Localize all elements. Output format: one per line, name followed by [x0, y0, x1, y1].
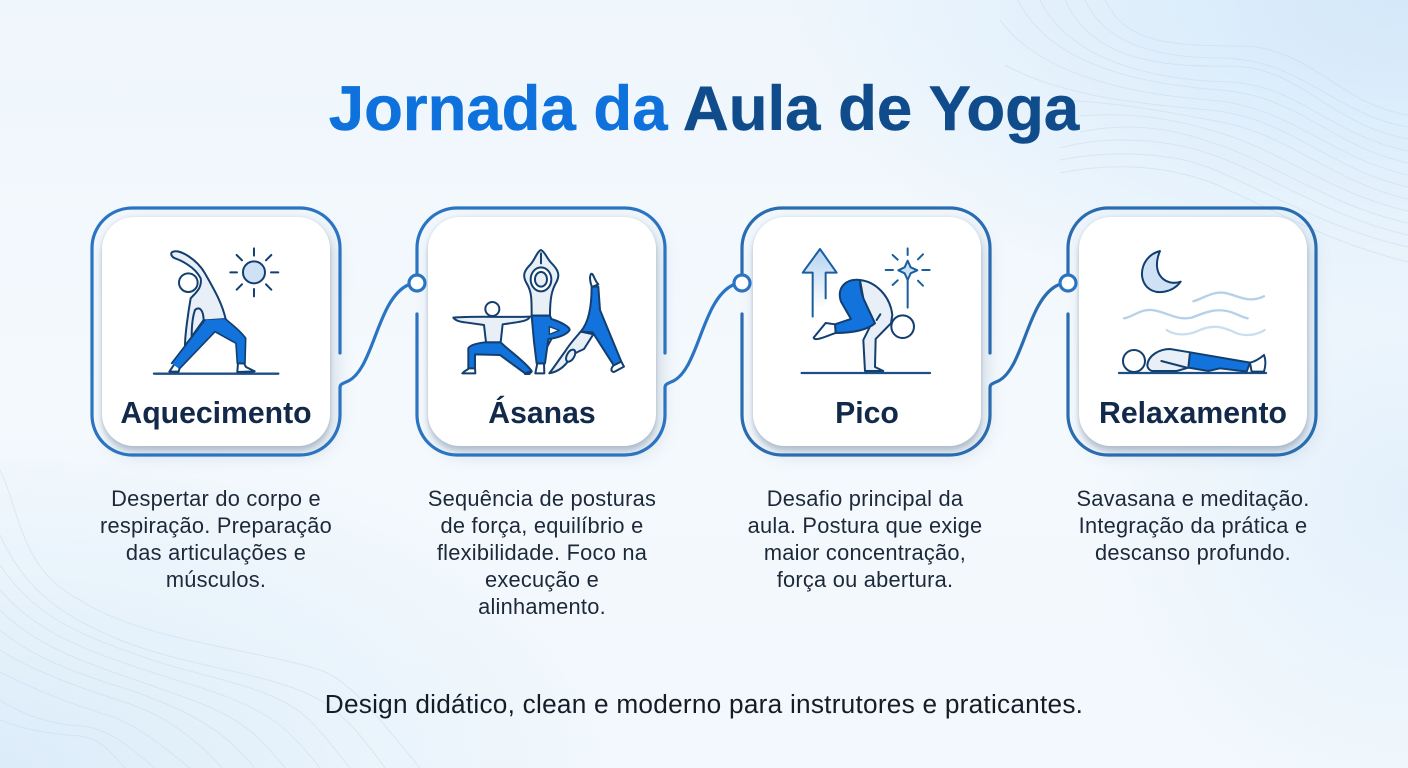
text: aquecimento description: músculos.	[166, 567, 266, 592]
text: pico description: aula. Postura que exige	[748, 513, 982, 538]
text: ásanas description: Sequência de posturas	[428, 486, 656, 511]
text: relaxamento description: descanso profundo.	[1095, 540, 1291, 565]
heading: relaxamento: Relaxamento	[1099, 397, 1287, 430]
text: pico description: maior concentração,	[764, 540, 966, 565]
text: aquecimento description: respiração. Preparação	[100, 513, 332, 538]
heading: pico: Pico	[835, 397, 899, 430]
text: ásanas description: execução e	[485, 567, 599, 592]
frame: ásanas	[417, 208, 733, 455]
text: ásanas description: flexibilidade. Foco na	[437, 540, 647, 565]
text: ásanas description	[428, 486, 656, 619]
node 1	[409, 275, 425, 291]
text: aquecimento description: das articulações e	[126, 540, 306, 565]
title: Jornada da Aula de Yoga	[329, 74, 1079, 144]
frame: pico	[742, 208, 1058, 455]
text: relaxamento description: Integração da prática e	[1079, 513, 1307, 538]
node 3	[1060, 275, 1076, 291]
frame: relaxamento	[1068, 208, 1316, 455]
heading: aquecimento: Aquecimento	[120, 397, 312, 430]
text: pico description: força ou abertura.	[777, 567, 953, 592]
panel: relaxamento card	[1079, 217, 1307, 446]
panel: ásanas card	[428, 217, 656, 446]
panel: pico card	[753, 217, 981, 446]
text: pico description	[748, 486, 982, 592]
text: aquecimento description	[100, 486, 332, 592]
footer note: Design didático, clean e moderno para instrutores e praticantes.	[325, 689, 1083, 719]
heading: ásanas: Ásanas	[488, 397, 596, 430]
text: relaxamento description: Savasana e meditação.	[1076, 486, 1310, 511]
text: ásanas description: de força, equilíbrio e	[440, 513, 644, 538]
node 2	[734, 275, 750, 291]
text: ásanas description: alinhamento.	[478, 594, 606, 619]
text: aquecimento description: Despertar do corpo e	[111, 486, 321, 511]
text: relaxamento description	[1076, 486, 1310, 565]
panel: aquecimento card	[102, 217, 330, 446]
frame: aquecimento	[92, 208, 408, 455]
text: pico description: Desafio principal da	[767, 486, 963, 511]
